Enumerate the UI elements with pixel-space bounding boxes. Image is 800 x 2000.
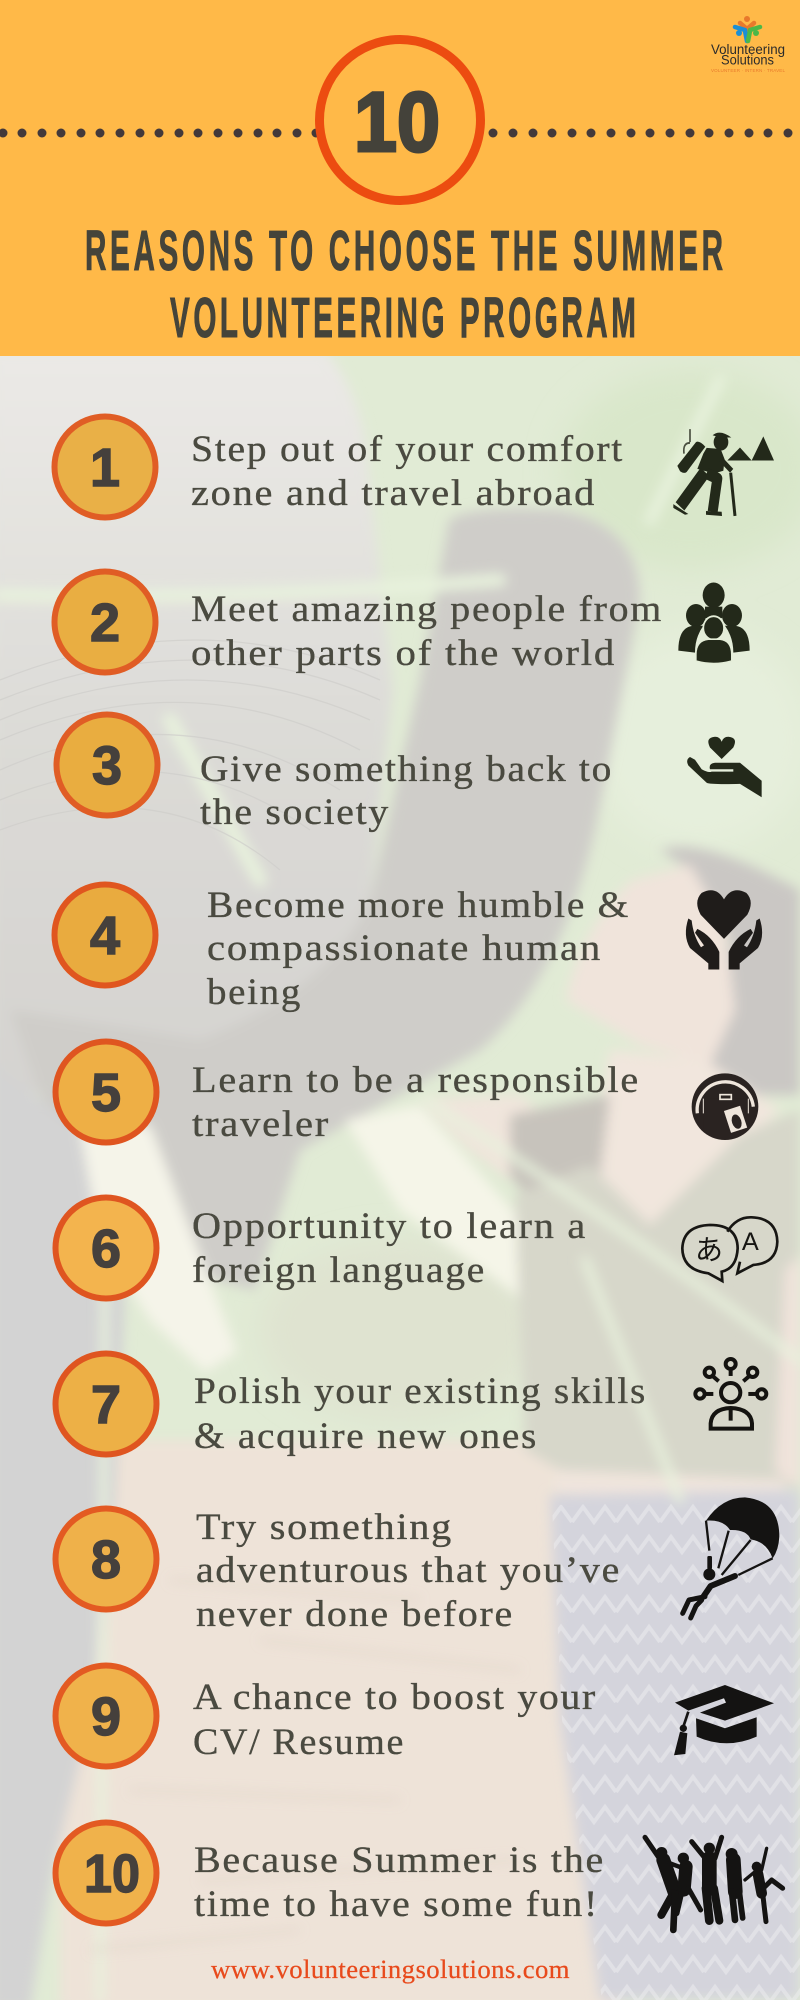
text 4: [207, 885, 630, 1013]
text 10: Because Summer is the: [194, 1840, 605, 1881]
text 8: [196, 1507, 621, 1635]
reason 8: [56, 1497, 779, 1635]
number badge 10: 10: [84, 1844, 140, 1904]
dotted line left: [0, 128, 320, 138]
text 5: Learn to be a responsible: [192, 1060, 640, 1101]
text 4: compassionate human: [207, 928, 602, 969]
reason 4: [54, 884, 762, 1013]
icon: suitcase in circle: [692, 1073, 758, 1140]
text 9: CV/ Resume: [193, 1722, 405, 1763]
text 6: Opportunity to learn a: [192, 1206, 587, 1247]
number badge 9: [56, 1666, 156, 1766]
text 7: [194, 1371, 647, 1457]
number badge 1: 1: [90, 438, 120, 498]
number badge 7: 7: [91, 1375, 121, 1435]
elephant head: [0, 350, 393, 1120]
dotted line right: [488, 128, 792, 138]
text 2: Meet amazing people from: [191, 589, 663, 630]
icon: heart in hand: [687, 737, 762, 797]
number badge 6: [56, 1198, 156, 1298]
reason 9: [56, 1666, 774, 1766]
number badge 9: 9: [91, 1687, 121, 1747]
reason 10: [56, 1822, 783, 1930]
icon: jumping friends: [645, 1837, 783, 1930]
icon: hands holding heart: [686, 890, 762, 969]
elephant skin wrinkles: [0, 640, 380, 870]
number badge 2: 2: [90, 593, 120, 653]
number badge 3: [56, 714, 158, 816]
header band: [0, 0, 800, 356]
text 6: [192, 1206, 587, 1291]
title: REASONS TO CHOOSE THE SUMMER: [85, 219, 723, 283]
reason 1: [54, 416, 774, 518]
title: VOLUNTEERING PROGRAM: [170, 286, 636, 350]
website url: www.volunteeringsolutions.com: [211, 1955, 570, 1984]
number badge 10: [56, 1822, 156, 1924]
text 7: & acquire new ones: [194, 1416, 538, 1457]
big number badge: [320, 40, 480, 200]
number badge 6: 6: [91, 1219, 121, 1279]
number badge 7: [56, 1354, 156, 1454]
text 1: zone and travel abroad: [191, 473, 596, 514]
icon: hiker: [673, 429, 774, 516]
hair: [660, 847, 800, 1095]
text 7: Polish your existing skills: [194, 1371, 647, 1412]
logo: Volunteering Solutions: VOLUNTEER · INTERN · TRAVEL: [711, 68, 785, 73]
number badge 1: [54, 416, 156, 518]
number badge 4: [54, 884, 156, 986]
icon: group of people: [678, 583, 750, 663]
ground streaks: [90, 1580, 520, 1950]
reason 7: [56, 1354, 766, 1457]
ground: [60, 1440, 620, 2000]
reason 3: [56, 714, 762, 833]
text 1: Step out of your comfort: [191, 429, 624, 470]
icon: parachutist: [683, 1497, 779, 1618]
tusks: [78, 1120, 237, 1372]
icon: speech bubbles: A: [742, 1228, 759, 1256]
text 5: traveler: [192, 1104, 330, 1145]
text 2: [191, 589, 663, 674]
text 10: [194, 1840, 605, 1925]
elephant trunk: [10, 509, 640, 1290]
reason 5: [56, 1042, 758, 1145]
reason 2: [54, 572, 750, 674]
text 4: Become more humble &: [207, 885, 630, 926]
number badge 4: 4: [90, 906, 120, 966]
text 9: [193, 1677, 597, 1763]
number badge 8: [56, 1508, 156, 1610]
text 3: the society: [200, 792, 390, 833]
shirt: [515, 1110, 800, 1490]
number badge 2: [54, 572, 156, 672]
icon: graduation cap: [674, 1685, 774, 1755]
text 8: adventurous that you’ve: [196, 1550, 621, 1591]
text 10: time to have some fun!: [194, 1884, 599, 1925]
text 8: never done before: [196, 1594, 514, 1635]
elephant leg: [0, 1060, 125, 2000]
text 4: being: [207, 972, 302, 1013]
number badge 8: 8: [91, 1530, 121, 1590]
text 8: Try something: [196, 1507, 453, 1548]
text 2: other parts of the world: [191, 633, 616, 674]
title: [85, 219, 723, 350]
number badge 5: 5: [91, 1063, 121, 1123]
text 1: [191, 429, 624, 514]
number badge 5: [56, 1042, 156, 1142]
text 6: foreign language: [192, 1250, 486, 1291]
arm: [420, 1095, 560, 1180]
text 9: A chance to boost your: [193, 1677, 597, 1718]
neck and chest: [590, 1050, 780, 1225]
number badge 3: 3: [92, 736, 122, 796]
text 5: [192, 1060, 640, 1145]
face: [566, 865, 735, 1065]
right arm: [775, 1255, 800, 1490]
logo: Volunteering Solutions: Volunteering: [711, 42, 785, 57]
reason 6: [56, 1198, 777, 1298]
icon: speech bubbles: [682, 1217, 777, 1281]
big number badge: 10: [354, 75, 440, 169]
logo: Volunteering Solutions: Solutions: [721, 52, 774, 68]
text 3: Give something back to: [200, 749, 613, 790]
ponytail: [510, 1095, 610, 1210]
text 3: [200, 749, 613, 833]
icon: skills person: [695, 1359, 766, 1429]
icon: speech bubbles: あ: [695, 1234, 723, 1265]
waist: [555, 1470, 785, 1520]
skirt: [550, 1490, 800, 2000]
logo: Volunteering Solutions: [711, 16, 785, 73]
